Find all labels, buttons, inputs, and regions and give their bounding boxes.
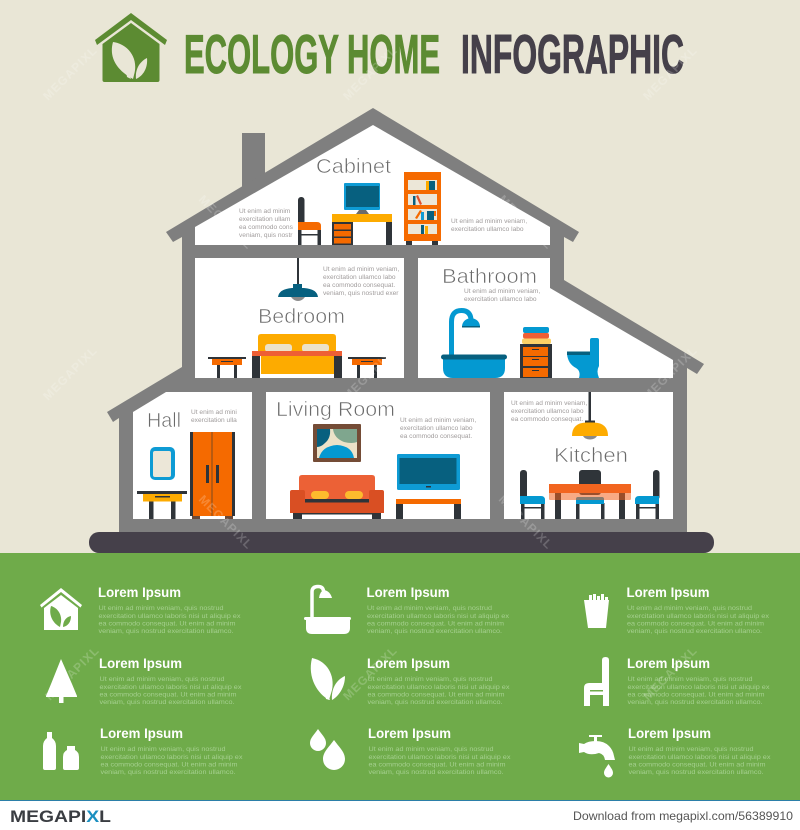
info item: chair: veniam, quis nostrud exercitation ullamco. xyxy=(628,699,763,706)
download caption: Download from megapixl.com/56389910 xyxy=(573,809,793,823)
bedroom text: veniam, quis nostrud exer xyxy=(323,290,399,297)
info item: chair: Ut enim ad minim veniam, quis nostrud xyxy=(628,676,753,683)
info item: home: Ut enim ad minim veniam, quis nostrud xyxy=(98,605,224,612)
info item: bottles: Lorem Ipsum xyxy=(100,726,183,741)
pendant lamp xyxy=(278,258,318,301)
kitchen text: ea commodo consequat. xyxy=(511,416,583,423)
info item: bathtub: Ut enim ad minim veniam, quis nostrud xyxy=(367,605,492,612)
label: living room: Living Room xyxy=(276,399,395,421)
info item: bottles: exercitation ullamco laboris nisi ut aliquip ex xyxy=(100,754,243,761)
info item: leaves: Lorem Ipsum xyxy=(367,656,450,671)
watermarks: MEGAPIXL xyxy=(340,43,400,103)
info item: home: Lorem Ipsum xyxy=(98,585,181,600)
info item: water drops: Ut enim ad minim veniam, quis nostrud xyxy=(368,746,494,753)
kitchen pendant lamp xyxy=(572,392,608,440)
kitchen text: Ut enim ad minim veniam, xyxy=(511,400,587,407)
cabinet left text: veniam, quis nostr xyxy=(239,232,293,239)
info item: bathtub xyxy=(304,585,510,635)
footer logo: MEGAPI XL xyxy=(10,807,111,826)
room: cabinet xyxy=(195,125,550,245)
watermarks: MEGAPIXL xyxy=(196,492,256,552)
info item: fries: ea commodo consequat. Ut enim ad minim xyxy=(627,620,764,628)
mirror xyxy=(150,447,175,480)
info item: tree: Lorem Ipsum xyxy=(99,656,182,671)
left nightstand xyxy=(208,357,246,378)
info item: leaves: veniam, quis nostrud exercitation ullamco. xyxy=(368,699,503,706)
living room text xyxy=(400,417,476,440)
kitchen text xyxy=(511,400,587,423)
info item: leaves xyxy=(311,656,510,706)
bed xyxy=(252,334,342,378)
watermarks: MEGAPIXL xyxy=(640,43,700,103)
hall text: exercitation ulla xyxy=(191,417,237,424)
watermarks: MEGAPIXL xyxy=(40,43,100,103)
icon: tree xyxy=(46,659,77,703)
info item: tree: ea commodo consequat. Ut enim ad minim xyxy=(100,692,237,698)
cabinet right text: exercitation ullamco labo xyxy=(451,226,524,233)
info item: faucet: Lorem Ipsum xyxy=(628,726,711,741)
info item: bathtub: ea commodo consequat. Ut enim ad minim xyxy=(367,620,504,628)
watermarks: MEGAPIXL xyxy=(496,192,556,252)
info item: water drops: Lorem Ipsum xyxy=(368,726,451,741)
watermarks: MEGAPIXL xyxy=(42,643,102,703)
info item: fries xyxy=(584,585,770,635)
info item: bottles: ea commodo consequat. Ut enim ad minim xyxy=(100,762,238,768)
room: kitchen xyxy=(504,392,673,519)
room: bedroom xyxy=(195,258,404,378)
tv table xyxy=(396,499,461,519)
info item: faucet xyxy=(579,726,771,778)
foundation xyxy=(89,532,714,553)
info item: bathtub: Lorem Ipsum xyxy=(366,585,450,600)
house cross-section walls and roof xyxy=(107,108,704,532)
living room text: Ut enim ad minim veniam, xyxy=(400,417,476,424)
info item: bottles xyxy=(43,726,243,776)
living room text: ea commodo consequat. xyxy=(400,433,472,440)
green ground panel xyxy=(0,553,800,800)
toilet xyxy=(567,338,599,378)
cabinet right text xyxy=(451,218,527,233)
info item: leaves: ea commodo consequat. Ut enim ad minim xyxy=(368,692,505,698)
right nightstand xyxy=(348,357,386,378)
cabinet right text: Ut enim ad minim veniam, xyxy=(451,218,527,225)
watermarks xyxy=(40,43,700,703)
info item: leaves: exercitation ullamco laboris nisi ut aliquip ex xyxy=(368,684,510,691)
info item: fries: veniam, quis nostrud exercitation ullamco. xyxy=(627,628,762,635)
label: hall: Hall xyxy=(147,410,181,432)
info item: bathtub: exercitation ullamco laboris nisi ut aliquip ex xyxy=(367,613,510,620)
bathroom text xyxy=(464,288,540,303)
info item: faucet: exercitation ullamco laboris nisi ut aliquip ex xyxy=(628,754,771,761)
icon: leaves xyxy=(311,658,345,700)
television xyxy=(397,454,460,490)
info item: fries: Lorem Ipsum xyxy=(626,585,710,600)
icon: eco house xyxy=(40,588,82,630)
icon: faucet xyxy=(579,735,615,778)
cabinet left text: ea commodo cons xyxy=(239,224,294,231)
right dining chair xyxy=(635,470,660,519)
icon: bottles xyxy=(43,732,79,770)
computer monitor xyxy=(344,183,380,214)
info item: fries: exercitation ullamco laboris nisi ut aliquip ex xyxy=(627,613,770,620)
label: kitchen: Kitchen xyxy=(554,445,628,467)
watermarks: MEGAPIXL xyxy=(640,643,700,703)
info item: bottles: Ut enim ad minim veniam, quis nostrud xyxy=(100,746,226,753)
room: living room xyxy=(266,392,490,519)
info item: faucet: veniam, quis nostrud exercitation ullamco. xyxy=(628,769,764,776)
dining table xyxy=(549,484,631,519)
bedroom text: exercitation ullamco labo xyxy=(323,274,396,281)
room: hall xyxy=(133,392,252,519)
label: bathroom: Bathroom xyxy=(442,266,537,288)
info item: home: exercitation ullamco laboris nisi ut aliquip ex xyxy=(98,613,241,620)
info item: bathtub: veniam, quis nostrud exercitation ullamco. xyxy=(367,628,502,635)
info item: chair: exercitation ullamco laboris nisi ut aliquip ex xyxy=(628,684,770,691)
watermarks: MEGAPIXL xyxy=(640,343,700,403)
bedroom text xyxy=(323,266,399,297)
cabinet left text xyxy=(239,208,294,239)
info item: faucet: Ut enim ad minim veniam, quis nostrud xyxy=(628,746,754,753)
watermarks: MEGAPIXL xyxy=(340,643,400,703)
info item: home xyxy=(40,585,241,635)
console table xyxy=(137,491,187,519)
kitchen text: exercitation ullamco labo xyxy=(511,408,584,415)
info item: tree: veniam, quis nostrud exercitation ullamco. xyxy=(100,699,235,706)
sofa xyxy=(290,475,384,519)
info item: chair: ea commodo consequat. Ut enim ad minim xyxy=(628,692,765,698)
bathtub with shower xyxy=(441,310,507,378)
hall text xyxy=(191,409,237,424)
cabinet left text: Ut enim ad minim xyxy=(239,208,291,215)
info item: water drops: exercitation ullamco laboris nisi ut aliquip ex xyxy=(368,754,511,761)
info item: tree xyxy=(46,656,242,706)
info item: water drops xyxy=(310,726,511,776)
header logo: house with leaves xyxy=(95,13,167,82)
icon: water drops xyxy=(310,729,345,770)
info item: fries: Ut enim ad minim veniam, quis nostrud xyxy=(627,605,752,612)
info item: water drops: veniam, quis nostrud exercitation ullamco. xyxy=(368,769,504,776)
wardrobe xyxy=(190,432,235,519)
info item: bottles: veniam, quis nostrud exercitation ullamco. xyxy=(100,769,236,776)
info item: leaves: Ut enim ad minim veniam, quis nostrud xyxy=(368,676,493,683)
icon: bathtub xyxy=(304,586,351,634)
bookcase xyxy=(404,172,441,245)
info item: chair xyxy=(584,656,770,706)
bathroom text: Ut enim ad minim veniam, xyxy=(464,288,540,295)
living room text: exercitation ullamco labo xyxy=(400,425,473,432)
bathroom text: exercitation ullamco labo xyxy=(464,296,537,303)
room: bathroom xyxy=(418,258,673,378)
desk with drawers xyxy=(332,214,392,245)
towels and drawers xyxy=(520,327,552,378)
info item: tree: exercitation ullamco laboris nisi ut aliquip ex xyxy=(100,684,242,691)
title: ECOLOGY HOME xyxy=(184,23,440,85)
info item: tree: Ut enim ad minim veniam, quis nostrud xyxy=(100,676,225,683)
left dining chair xyxy=(520,470,545,519)
info item: faucet: ea commodo consequat. Ut enim ad minim xyxy=(628,762,766,768)
label: cabinet: Cabinet xyxy=(316,156,391,178)
icon: fries box xyxy=(584,594,609,628)
watermarks: MEGAPIXL xyxy=(340,343,400,403)
watermarks: MEGAPIXL xyxy=(496,492,556,552)
info item: chair: Lorem Ipsum xyxy=(627,656,710,671)
framed picture xyxy=(313,424,361,462)
info item: home: veniam, quis nostrud exercitation ullamco. xyxy=(98,628,234,635)
info item: water drops: ea commodo consequat. Ut enim ad minim xyxy=(368,762,506,768)
bedroom text: ea commodo consequat. xyxy=(323,282,395,289)
bedroom text: Ut enim ad minim veniam, xyxy=(323,266,399,273)
cabinet left text: exercitation ullam xyxy=(239,216,291,223)
footer strip xyxy=(0,800,800,830)
watermarks: MEGAPIXL xyxy=(40,343,100,403)
label: bedroom: Bedroom xyxy=(258,306,345,328)
chair xyxy=(298,197,321,245)
icon: chair xyxy=(584,657,609,706)
hall text: Ut enim ad mini xyxy=(191,409,237,416)
watermarks: MEGAPIXL xyxy=(196,192,256,252)
info item: home: ea commodo consequat. Ut enim ad minim xyxy=(98,620,236,628)
middle dining chair xyxy=(576,470,604,519)
